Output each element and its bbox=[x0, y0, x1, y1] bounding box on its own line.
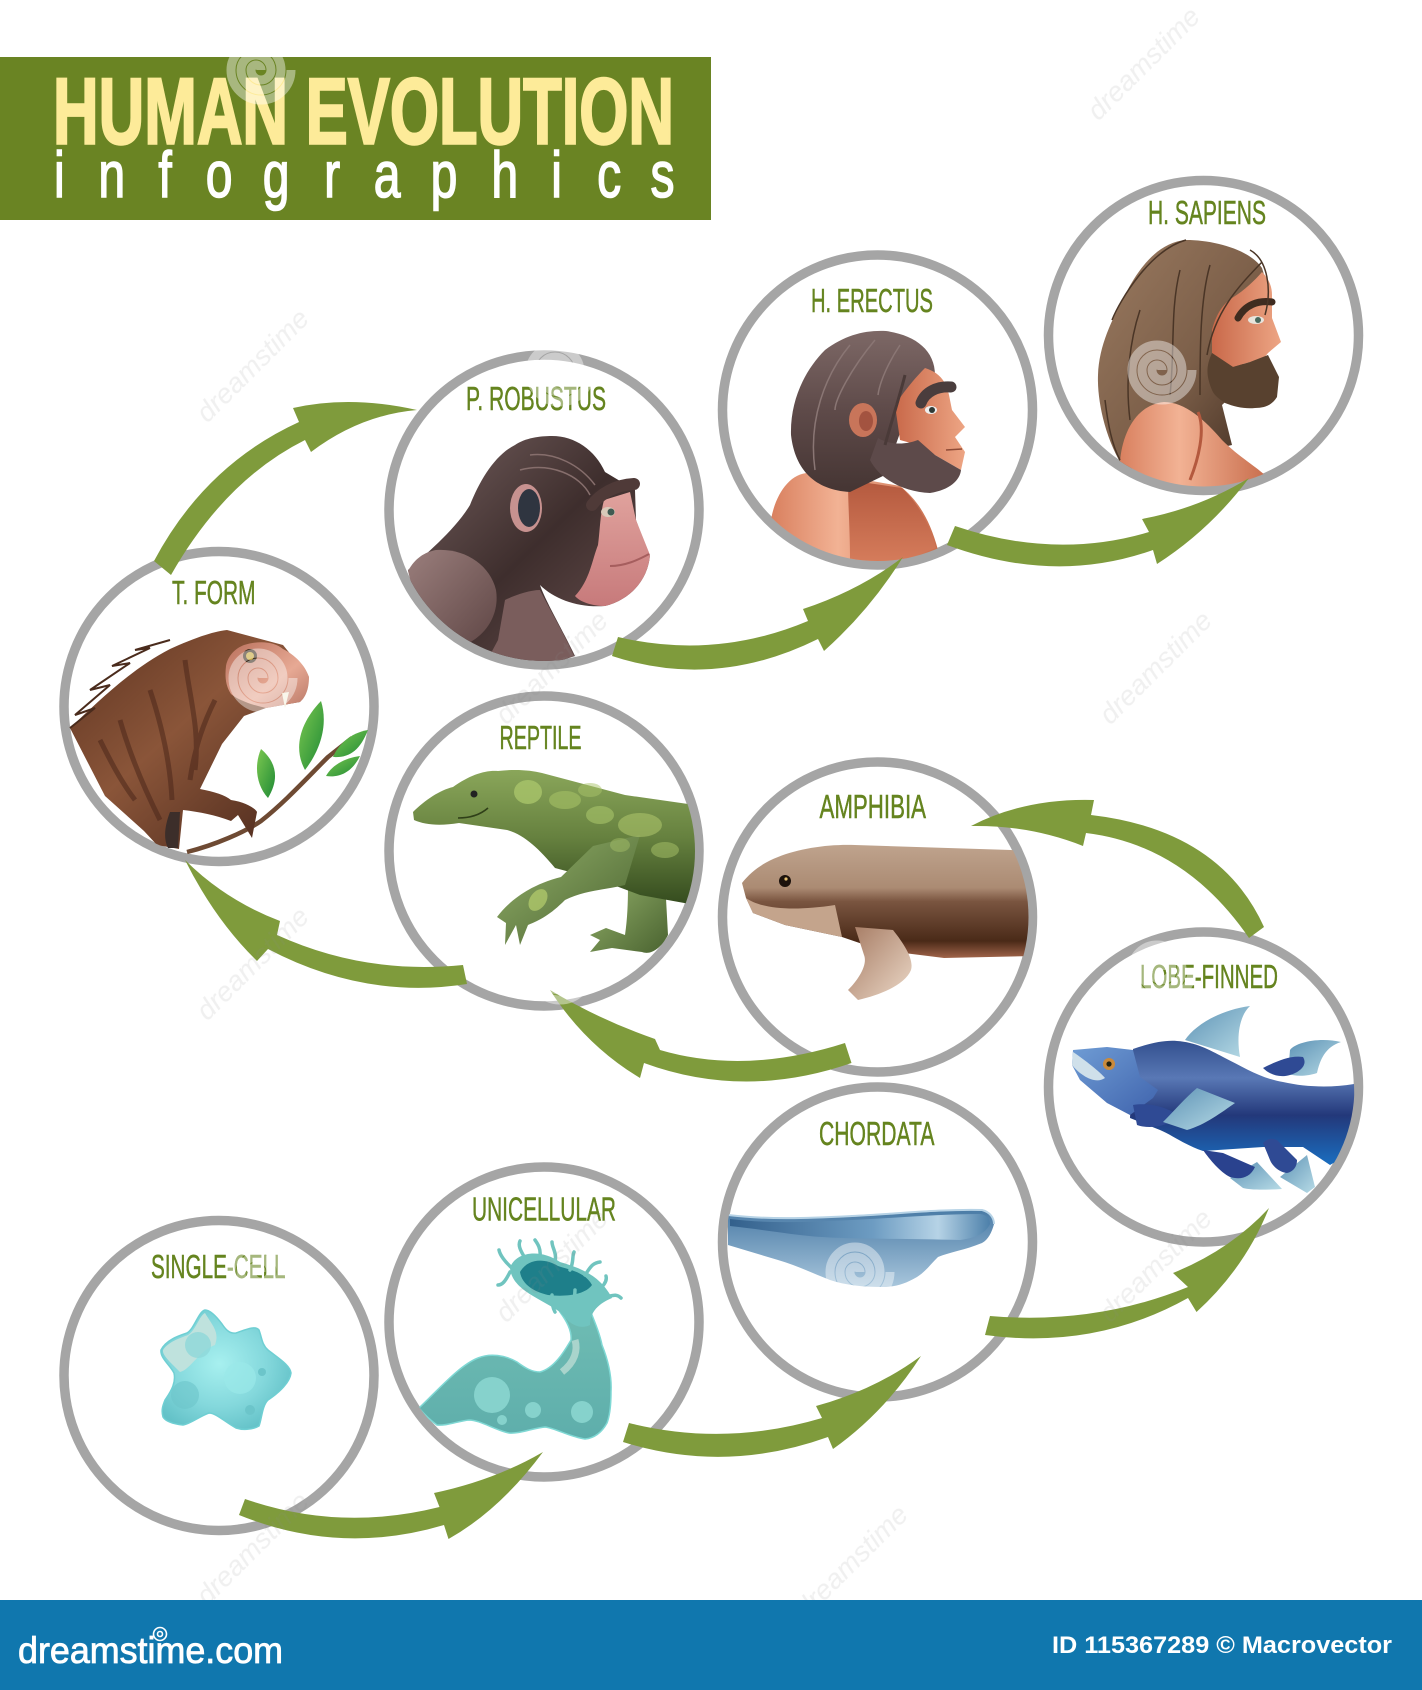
panel: Chordata bbox=[722, 1087, 1032, 1397]
label: T. Form: T. FORM bbox=[172, 574, 256, 611]
label: P. Robustus: P. ROBUSTUS bbox=[466, 380, 606, 417]
illustration: P. Robustus head bbox=[408, 436, 650, 668]
arrow: T. Form to P. Robustus bbox=[154, 402, 417, 575]
panel: Amphibia bbox=[722, 762, 1032, 1072]
panel: P. Robustus bbox=[389, 355, 699, 668]
heading: Human Evolution: HUMAN EVOLUTION bbox=[53, 58, 674, 164]
footer bar bbox=[0, 1600, 1422, 1690]
arrow: chordata to lobe-finned bbox=[985, 1208, 1269, 1338]
arrow: lobe-finned to amphibia bbox=[971, 800, 1264, 938]
illustration: H. Sapiens head bbox=[1098, 240, 1281, 500]
watermark text: dreamstime bbox=[489, 1203, 614, 1328]
watermark text: dreamstime bbox=[489, 605, 614, 730]
watermark text: dreamstime bbox=[190, 1486, 315, 1611]
icon: logo spiral bbox=[154, 1628, 166, 1640]
watermark spirals bbox=[231, 45, 1192, 1598]
watermark text: dreamstime bbox=[1093, 605, 1218, 730]
panel: T. Form bbox=[64, 552, 374, 862]
illustration: Chordata bbox=[728, 1210, 994, 1287]
label: Lobe-finned: LOBE-FINNED bbox=[1140, 958, 1278, 995]
label: H. Sapiens: H. SAPIENS bbox=[1148, 194, 1266, 231]
illustration: Single cell bbox=[161, 1310, 291, 1429]
watermark text: dreamstime bbox=[789, 1499, 914, 1624]
watermark text bbox=[190, 1, 1218, 1624]
illustration: Lobe-finned fish bbox=[1072, 1006, 1356, 1193]
watermark text: dreamstime bbox=[190, 901, 315, 1026]
arrow: H. Erectus to H. Sapiens bbox=[947, 478, 1249, 566]
label: H. Erectus: H. ERECTUS bbox=[811, 282, 933, 319]
arrow: unicellular to chordata bbox=[623, 1356, 921, 1457]
panel: Unicellular bbox=[389, 1167, 699, 1477]
arrow: reptile to T. Form bbox=[185, 860, 467, 988]
illustration: H. Erectus head bbox=[771, 331, 965, 575]
footer credit: ID 115367289 © Macrovector bbox=[1052, 1632, 1392, 1659]
illustration: Reptile bbox=[413, 770, 695, 953]
label: Amphibia: AMPHIBIA bbox=[820, 788, 926, 825]
illustration: Unicellular organism bbox=[419, 1240, 621, 1439]
illustration: Amphibia fish bbox=[742, 845, 1032, 1000]
arrow: P. Robustus to H. Erectus bbox=[612, 557, 903, 670]
subheading: infographics: infographics bbox=[54, 139, 675, 212]
arrow: amphibia to reptile bbox=[550, 990, 852, 1082]
panel: Lobe-finned bbox=[1048, 932, 1358, 1242]
title banner bbox=[0, 57, 711, 220]
illustration: T. Form animal with branch bbox=[70, 630, 368, 852]
panel: H. Erectus bbox=[722, 255, 1032, 575]
label: Unicellular: UNICELLULAR bbox=[472, 1190, 616, 1228]
label: Single-cell: SINGLE-CELL bbox=[151, 1248, 286, 1285]
panel: Reptile bbox=[389, 696, 699, 1006]
footer logo: dreamstime.com: dreamstime.com bbox=[18, 1630, 283, 1671]
panel: H. Sapiens bbox=[1048, 180, 1358, 500]
panel: Single-cell bbox=[64, 1220, 374, 1530]
watermark text: dreamstime bbox=[1081, 1, 1206, 126]
label: Chordata: CHORDATA bbox=[819, 1115, 934, 1152]
watermark text: dreamstime bbox=[1093, 1203, 1218, 1328]
watermark text: dreamstime bbox=[190, 303, 315, 428]
label: Reptile: REPTILE bbox=[500, 719, 582, 756]
arrow: single-cell to unicellular bbox=[239, 1452, 543, 1539]
